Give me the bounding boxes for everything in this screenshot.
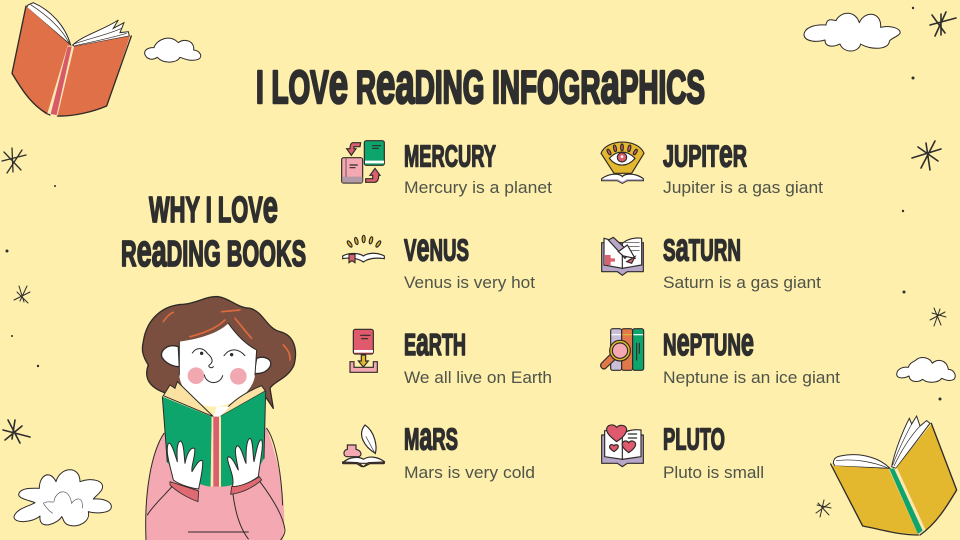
heading: NePTUNe: [663, 321, 754, 364]
heading: VeNUS: [404, 226, 469, 270]
cloud: top right: [804, 13, 900, 51]
description: Venus is very hot: [404, 273, 535, 292]
description: Neptune is an ice giant: [663, 368, 840, 387]
yellow book pages: [833, 455, 890, 468]
item: Earth: [350, 321, 552, 387]
girl body: [146, 428, 284, 540]
left hand: [167, 441, 203, 489]
item: Venus: [343, 226, 535, 292]
heading: EaRTH: [404, 321, 466, 364]
description: We all live on Earth: [404, 368, 552, 387]
heading: SaTURN: [663, 226, 741, 270]
item: Saturn: [602, 226, 821, 292]
heading: why I love reading books: ReaDING BOOKS: [121, 225, 306, 276]
item: Pluto: [602, 422, 764, 482]
description: Jupiter is a gas giant: [663, 178, 823, 197]
heading: PLUTO: [663, 422, 725, 456]
icon: eye over book: [601, 142, 644, 183]
icon: swapping books: [342, 141, 384, 183]
cloud: bottom left: [14, 470, 111, 526]
heading: MERCURY: [404, 138, 496, 174]
title: I LOVe ReaDING INFOGRaPHICS: [256, 52, 705, 116]
icon: book into tray: [350, 329, 377, 372]
icon: books and magnifier: [601, 329, 644, 370]
icon: book and pen: [602, 237, 643, 275]
description: Saturn is a gas giant: [663, 273, 821, 292]
description: Pluto is small: [663, 463, 764, 482]
item: Mars: [343, 416, 535, 482]
heading: JUPITeR: [663, 132, 747, 176]
heading: MaRS: [404, 416, 458, 458]
item: Neptune: [601, 321, 840, 387]
green book covers: [162, 397, 212, 487]
book pages: [163, 382, 213, 417]
heading: why I love reading books: [121, 181, 306, 276]
description: Mercury is a planet: [404, 178, 552, 197]
ears: [161, 346, 179, 367]
orange book pages: [27, 3, 71, 45]
illustration: orange book: [12, 3, 131, 116]
face: [179, 323, 257, 407]
description: Mars is very cold: [404, 463, 535, 482]
cloud: top left: [145, 38, 201, 62]
item: Mercury: [342, 138, 552, 197]
illustration: girl reading a book: [142, 297, 296, 540]
icon: glowing open book: [343, 235, 384, 263]
hair: [142, 297, 296, 408]
right hand: [228, 438, 262, 487]
cloud: right side: [897, 358, 955, 382]
illustration: yellow book: [831, 416, 957, 535]
heading: why I love reading books: WHY I LOVe: [149, 181, 278, 232]
sleeve cuffs: [170, 477, 262, 502]
icon: quill and ink: [343, 425, 384, 467]
icon: book with hearts: [602, 425, 643, 467]
item: Jupiter: [601, 132, 823, 197]
